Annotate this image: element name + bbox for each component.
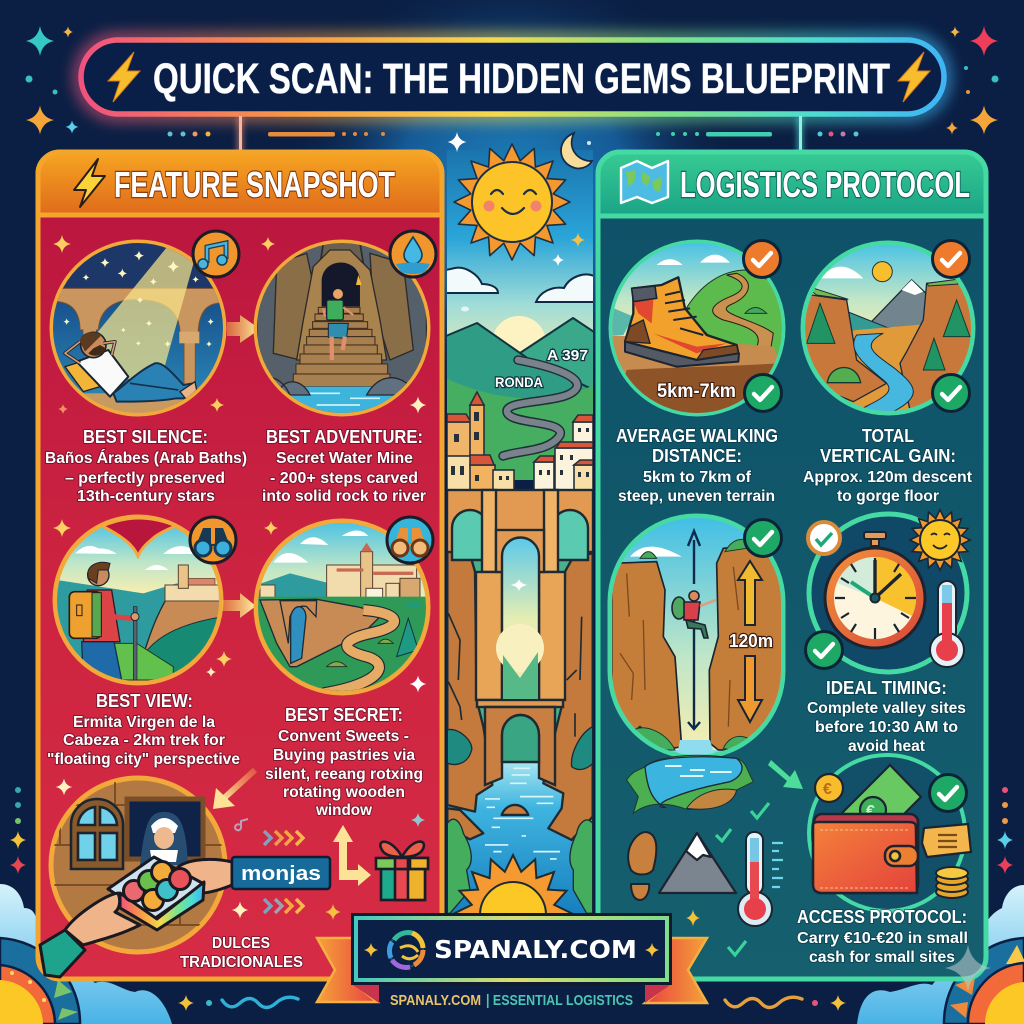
sparkles over sky [448, 132, 585, 266]
description: into solid rock to river [262, 488, 426, 505]
brand tagline [390, 992, 633, 1009]
distance label: 5km-7km [657, 381, 736, 402]
panel background [38, 152, 442, 979]
thermometer [930, 581, 964, 667]
description: to gorge floor [837, 488, 939, 505]
card: ideal timing [806, 510, 970, 755]
euro banknote: € [866, 803, 875, 820]
description: 13th-century stars [77, 488, 215, 505]
river pool illustration [627, 755, 753, 813]
heading [616, 426, 778, 466]
description: - 200+ steps carved [270, 470, 418, 487]
heading: VERTICAL GAIN: [820, 446, 956, 466]
thermometer icon [738, 832, 783, 926]
card: 120m descent capsule [610, 516, 783, 757]
heading: DISTANCE: [652, 446, 742, 466]
check badge [930, 774, 966, 812]
description: Cabeza - 2km trek for [63, 732, 225, 749]
grey sparkle [945, 945, 991, 991]
check badges [806, 522, 842, 668]
description: Ermita Virgen de la [73, 714, 215, 731]
mini sun [910, 510, 970, 570]
bridge [447, 490, 593, 785]
wallet [813, 814, 918, 893]
ticket [922, 824, 971, 857]
header lightning icon [74, 159, 105, 207]
brand logo [389, 933, 423, 967]
description [807, 700, 966, 755]
brand tagline: SPANALY.COM [390, 992, 481, 1009]
decorative dot rows [168, 132, 858, 136]
description [265, 728, 423, 819]
windows [451, 412, 589, 481]
music badge [193, 231, 239, 277]
river [447, 762, 593, 915]
header title: FEATURE SNAPSHOT [114, 164, 395, 205]
gorge behind bridge [473, 561, 570, 724]
title lightning left [108, 52, 140, 102]
euro coin [815, 774, 843, 802]
description: Carry €10-€20 in small [797, 930, 968, 947]
panel: feature snapshot [38, 152, 442, 979]
card: best view [47, 517, 240, 768]
description: "floating city" perspective [47, 751, 240, 768]
chevrons [264, 831, 303, 913]
description: window [315, 802, 373, 819]
card: walking distance [610, 238, 783, 505]
corner: left cloud and sun [0, 884, 172, 1024]
decorative sparkles left [10, 26, 78, 874]
brand name: SPANALY.COM [434, 935, 637, 964]
description: Buying pastries via [273, 747, 415, 764]
arrow [222, 593, 256, 618]
cliffs [447, 525, 593, 913]
bottom squiggle left [178, 995, 298, 1011]
description: avoid heat [848, 738, 926, 755]
card: best adventure [253, 231, 436, 505]
120m label: 120m [729, 631, 773, 651]
binoculars badge [387, 517, 433, 563]
description: – perfectly preserved [65, 470, 225, 487]
gift box [376, 842, 428, 900]
monjas label [232, 857, 330, 889]
description: before 10:30 AM to [815, 719, 958, 736]
card: access protocol [797, 755, 971, 966]
brand ribbon [317, 938, 707, 1003]
coin stack [936, 867, 968, 898]
mountains [446, 318, 594, 480]
description [797, 930, 968, 966]
description: 5km to 7km of [643, 469, 752, 486]
sparkle [686, 910, 700, 926]
card: best secret window illustration [40, 770, 428, 977]
shutter window [71, 799, 123, 869]
card: best secret [253, 517, 433, 819]
check badge [744, 520, 782, 556]
heart notch [102, 518, 176, 556]
corner: right cloud and sun [857, 885, 1024, 1024]
stopwatch [825, 532, 925, 648]
brand sparkles [364, 943, 659, 957]
description [45, 448, 247, 505]
description: Convent Sweets - [278, 728, 409, 745]
description: Baños Árabes (Arab Baths) [45, 448, 247, 467]
road label A 397: A 397 [547, 348, 588, 364]
description: Secret Water Mine [276, 450, 413, 467]
nun in window [127, 799, 203, 865]
dulces tradicionales: TRADICIONALES [180, 954, 303, 971]
card: vertical gain [800, 238, 977, 505]
road [503, 360, 577, 456]
heading: ACCESS PROTOCOL: [797, 907, 967, 927]
centre glow [282, 0, 742, 420]
panel header [598, 152, 986, 216]
road label RONDA: RONDA [495, 374, 543, 390]
panel: logistics protocol [598, 152, 991, 991]
brand box [353, 915, 670, 983]
check badges [932, 240, 970, 412]
panel background [598, 152, 986, 979]
water badge [390, 231, 436, 277]
heading: BEST SECRET: [285, 705, 403, 725]
climber arrow line [688, 531, 700, 729]
climber [672, 591, 716, 638]
heading: TOTAL [862, 426, 914, 446]
dulces tradicionales [180, 935, 303, 971]
heading: AVERAGE WALKING [616, 426, 778, 446]
description: Approx. 120m descent [803, 469, 973, 486]
pale sun [494, 316, 545, 352]
panel sparkles [53, 235, 426, 920]
euro coin: € [823, 781, 832, 798]
map icon [621, 161, 668, 203]
arrow to wallet [768, 760, 803, 789]
arrow to convent sweets [213, 770, 255, 809]
music note [235, 819, 248, 830]
bottom squiggle right [725, 995, 846, 1011]
description [803, 469, 973, 505]
smiling sun [454, 144, 570, 260]
description: silent, reeang rotxing [265, 766, 423, 783]
crescent moon [561, 133, 592, 168]
clouds [446, 268, 594, 302]
description: steep, uneven terrain [618, 488, 775, 505]
up and right arrow [333, 825, 371, 886]
check badges [744, 240, 782, 412]
120m double arrow [738, 561, 762, 722]
boot print icon [628, 832, 656, 900]
connector lines [237, 116, 803, 154]
description [47, 714, 240, 768]
heading [820, 426, 956, 466]
monjas label: monjas [241, 863, 321, 885]
centre illustration column [446, 150, 594, 971]
card: best silence [45, 231, 247, 505]
description [618, 469, 775, 505]
description: cash for small sites [809, 949, 955, 966]
buildings [447, 392, 593, 490]
decorative sparkles right [946, 26, 1013, 874]
heading: BEST VIEW: [96, 691, 193, 711]
brand tagline: | ESSENTIAL LOGISTICS [486, 992, 633, 1009]
arrow [227, 315, 260, 343]
bottom sun [452, 852, 574, 913]
dulces tradicionales: DULCES [212, 935, 270, 952]
heading: IDEAL TIMING: [826, 678, 947, 698]
heading: BEST SILENCE: [83, 427, 208, 447]
description: rotating wooden [283, 784, 405, 801]
hand with box [40, 857, 232, 977]
title lightning right [898, 52, 930, 102]
title banner [80, 39, 945, 115]
euro banknote [830, 765, 921, 838]
description [262, 450, 426, 505]
heading: BEST ADVENTURE: [266, 427, 423, 447]
panel header [38, 152, 442, 215]
small check marks [716, 803, 769, 955]
mountain icon [659, 833, 736, 893]
binoculars badge [190, 517, 236, 563]
description: Complete valley sites [807, 700, 966, 717]
view through arch [496, 579, 544, 699]
